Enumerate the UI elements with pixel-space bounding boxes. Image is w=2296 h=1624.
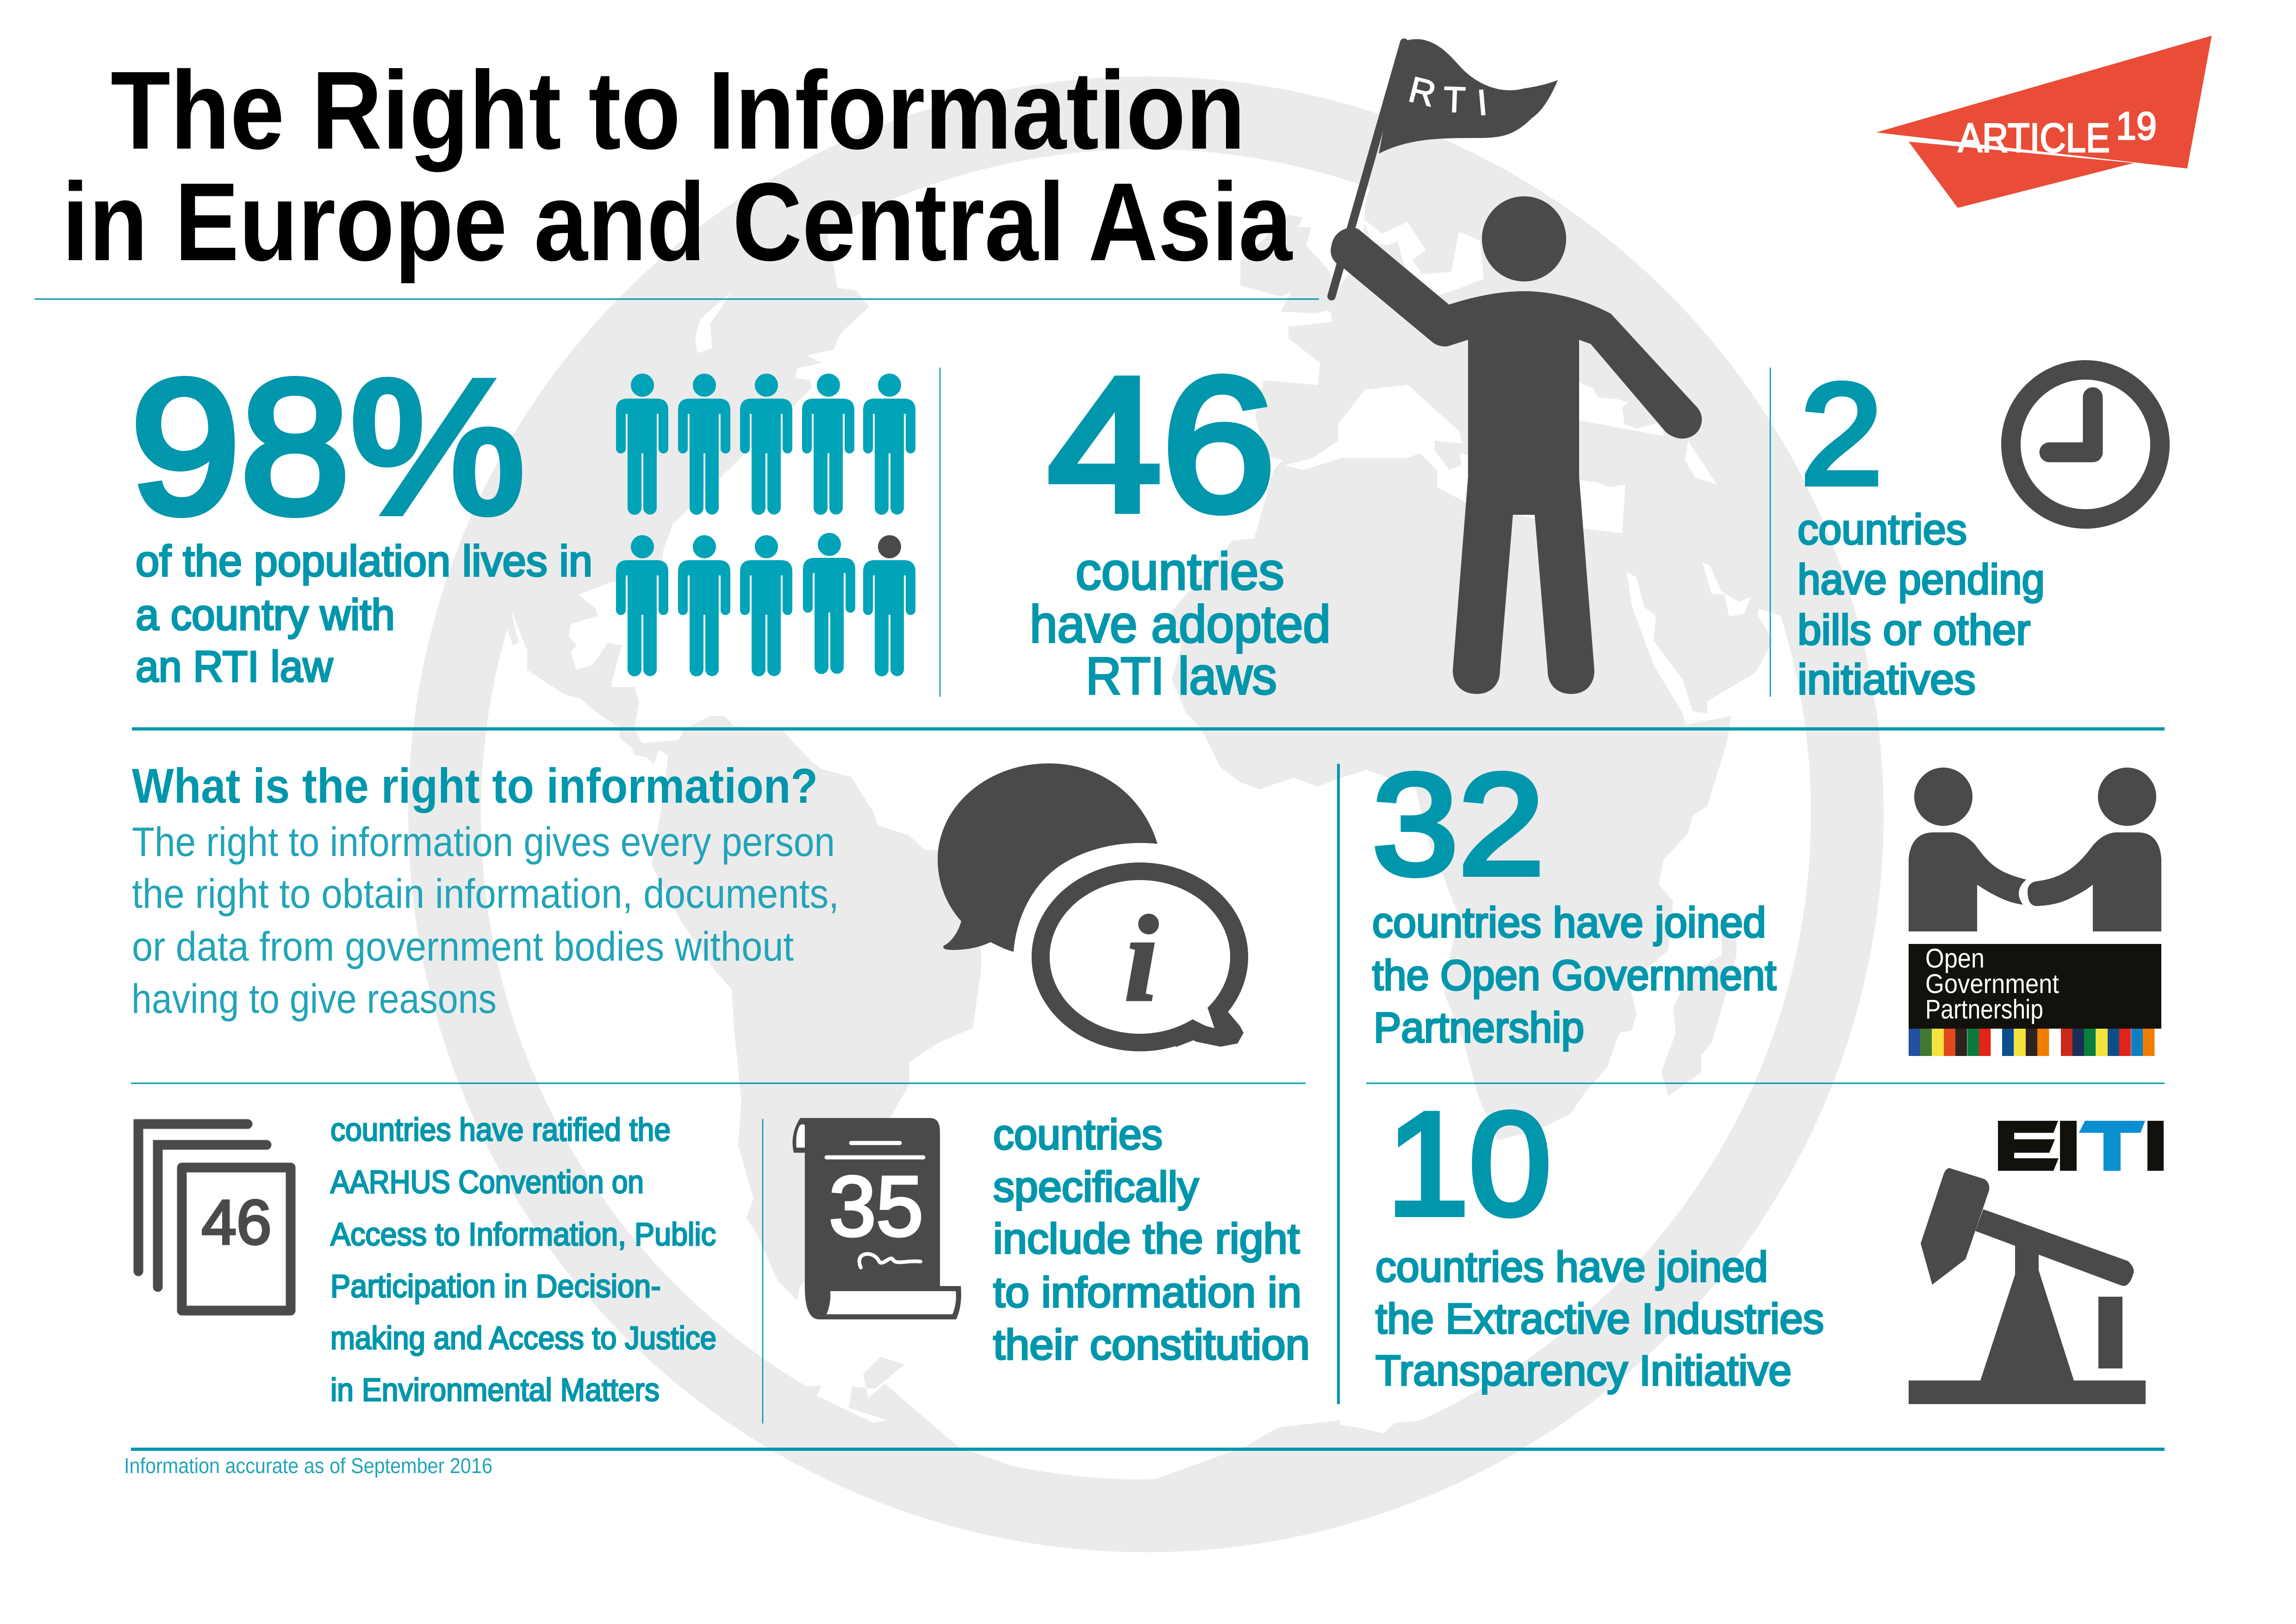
stat: 2 countries: initiatives xyxy=(1798,656,1976,703)
head xyxy=(1482,196,1566,281)
stat: 2 countries: countries xyxy=(1798,506,1967,553)
stat: 46 countries: countries xyxy=(1076,542,1284,600)
icon: document stack with 46: 46 xyxy=(201,1187,272,1257)
text block: what is the right to information xyxy=(131,759,839,1022)
stat: 98 percent: 98% xyxy=(131,341,525,553)
text: constitution: countries xyxy=(993,1111,1163,1158)
text block: what is the right to information: The right to information gives every person xyxy=(132,818,835,865)
title: The Right to Information xyxy=(111,48,1245,172)
stat: 98 percent: a country with xyxy=(136,590,395,639)
text: Aarhus convention xyxy=(330,1112,716,1408)
text block: what is the right to information: the right to obtain information, documents, xyxy=(132,870,839,917)
text: Aarhus convention: Access to Information, Public xyxy=(330,1216,716,1252)
stat: 46 countries xyxy=(1030,338,1331,705)
stat: 32 countries OGP: countries have joined xyxy=(1372,899,1766,946)
flag xyxy=(1379,39,1558,154)
text: constitution: include the right xyxy=(993,1215,1300,1262)
title: in Europe and Central Asia xyxy=(62,160,1293,284)
text: Aarhus convention: countries have ratified the xyxy=(330,1112,671,1148)
logo: Article 19 xyxy=(1876,36,2212,208)
logo: EITI xyxy=(1998,1121,2164,1171)
stat: 2 countries: 2 xyxy=(1800,353,1883,514)
icon: constitution scroll with 35 xyxy=(792,1118,961,1319)
text block: what is the right to information: What is the right to information? xyxy=(132,759,818,813)
logo: Open Government Partnership xyxy=(1909,943,2161,1056)
body xyxy=(1331,228,1702,694)
flag pole xyxy=(1332,43,1404,296)
text: Aarhus convention: making and Access to Justice xyxy=(330,1320,716,1356)
icon: clock xyxy=(2011,370,2160,519)
text: Aarhus convention: in Environmental Matters xyxy=(330,1372,660,1408)
stat: 2 countries: have pending xyxy=(1798,556,2045,603)
stat: 98 percent: of the population lives in xyxy=(136,537,592,585)
icon: ten people pictogram xyxy=(616,374,915,676)
stat: 98 percent xyxy=(131,341,592,691)
icon: document stack with 46 xyxy=(138,1124,291,1311)
flag letters: R xyxy=(1405,69,1440,114)
footnote: Information accurate as of September 2016 xyxy=(124,1454,492,1478)
icon: speech bubbles with info: i xyxy=(1124,891,1159,1027)
icon: speech bubbles with info xyxy=(938,763,1248,1051)
logo: Open Government Partnership: Government xyxy=(1925,969,2059,999)
icon: constitution scroll with 35: 35 xyxy=(829,1158,923,1254)
text: constitution xyxy=(993,1111,1310,1368)
text: constitution: specifically xyxy=(993,1163,1199,1211)
stat: 98 percent: an RTI law xyxy=(136,642,333,691)
text block: what is the right to information: or data from government bodies without xyxy=(132,923,794,969)
flag letters: I xyxy=(1475,81,1489,123)
title xyxy=(62,48,1293,284)
text: constitution: to information in xyxy=(993,1269,1301,1316)
stat: 2 countries xyxy=(1798,353,2045,703)
icon: oil pump xyxy=(1909,1168,2146,1404)
logo: Open Government Partnership: Partnership xyxy=(1925,994,2043,1024)
stat: 32 countries OGP xyxy=(1372,743,1776,1051)
icon: handshake xyxy=(1909,768,2161,931)
stat: 32 countries OGP: Partnership xyxy=(1374,1004,1584,1051)
logo: Article 19: 19 xyxy=(2116,104,2157,148)
stat: 32 countries OGP: the Open Government xyxy=(1372,952,1776,999)
logo: Open Government Partnership: Open xyxy=(1925,943,1985,974)
globe background xyxy=(444,113,1848,1528)
stat: 10 countries EITI xyxy=(1375,1082,1824,1394)
logo: Article 19: ARTICLE xyxy=(1958,115,2110,161)
stat: 46 countries: have adopted xyxy=(1030,595,1331,653)
stat: 10 countries EITI: countries have joined xyxy=(1375,1243,1768,1291)
stat: 2 countries: bills or other xyxy=(1798,606,2030,654)
text block: what is the right to information: having to give reasons xyxy=(131,975,497,1022)
text: Aarhus convention: AARHUS Convention on xyxy=(330,1164,644,1200)
icon: person holding RTI flag xyxy=(1331,39,1702,694)
flag letters xyxy=(1405,69,1489,123)
stat: 32 countries OGP: 32 xyxy=(1372,743,1544,905)
stat: 10 countries EITI: 10 xyxy=(1387,1082,1551,1245)
text: Aarhus convention: Participation in Decision- xyxy=(330,1268,661,1304)
stat: 10 countries EITI: Transparency Initiative xyxy=(1375,1347,1792,1394)
stat: 10 countries EITI: the Extractive Industries xyxy=(1375,1295,1824,1343)
stat: 46 countries: RTI laws xyxy=(1086,647,1277,705)
text: constitution: their constitution xyxy=(993,1321,1310,1368)
flag letters: T xyxy=(1443,79,1466,120)
stat: 46 countries: 46 xyxy=(1048,338,1276,551)
